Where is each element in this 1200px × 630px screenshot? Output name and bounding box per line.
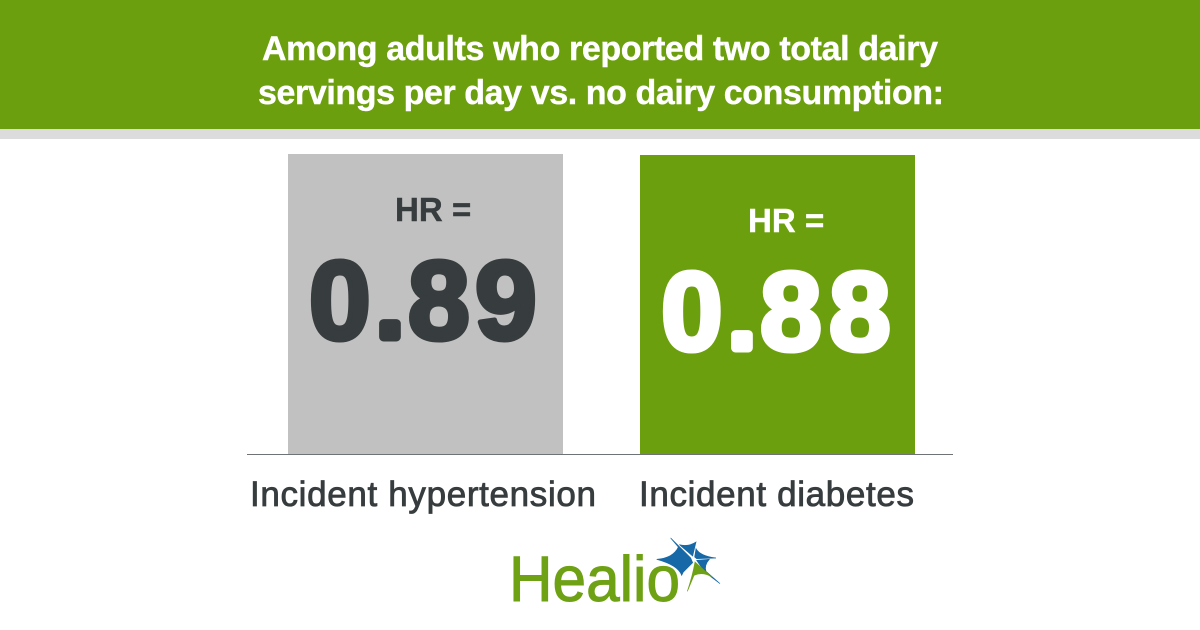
panel: hypertension bar <box>288 154 563 455</box>
hypertension HR value: 8 <box>408 239 470 363</box>
label: incident hypertension: Incident hypertension <box>250 475 596 514</box>
panel: diabetes bar <box>640 155 915 455</box>
title <box>258 30 944 112</box>
diabetes HR label: HR <box>748 202 796 239</box>
diabetes HR value: 8 <box>760 250 822 374</box>
diabetes HR value: . <box>730 268 755 368</box>
logo wordmark: Healio <box>509 543 680 615</box>
logo: Healio <box>509 538 720 615</box>
hypertension HR value: 0 <box>309 239 371 363</box>
hypertension HR value: 9 <box>475 239 537 363</box>
header banner <box>0 0 1200 139</box>
hypertension HR value: . <box>378 257 403 357</box>
diabetes HR value: 0 <box>661 250 723 374</box>
diabetes HR value: 8 <box>829 250 891 374</box>
hypertension HR label: HR <box>395 191 443 228</box>
diabetes HR label: = <box>805 202 824 239</box>
hypertension HR label: = <box>452 191 471 228</box>
title: servings per day vs. no dairy consumption: <box>258 74 944 112</box>
label: incident diabetes: Incident diabetes <box>639 475 914 514</box>
title: Among adults who reported two total dairy <box>262 30 938 68</box>
icon: star <box>657 538 720 591</box>
